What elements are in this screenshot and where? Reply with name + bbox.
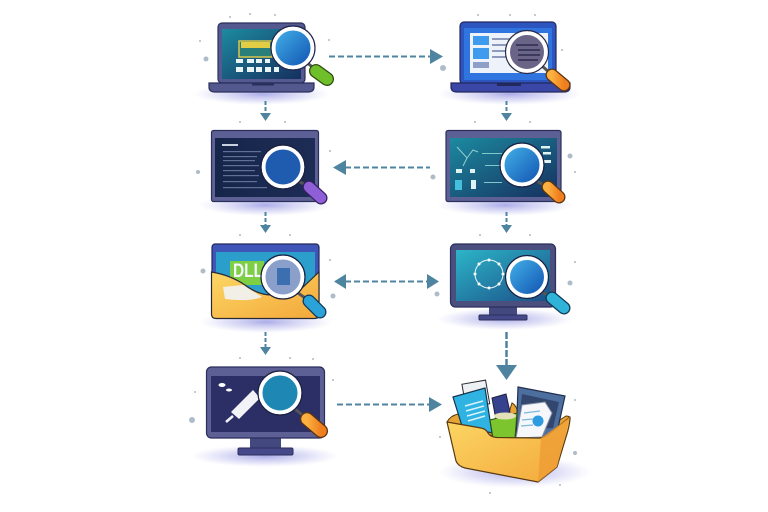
arrow: row 2 left down	[260, 212, 271, 233]
magnifier	[261, 255, 320, 312]
arrow: laptop to laptop	[329, 49, 443, 64]
label: DLL: DLL	[233, 261, 263, 282]
magnifier	[506, 30, 564, 85]
magnifier	[258, 371, 321, 431]
arrow: row 1 left down	[260, 101, 271, 121]
arrow: row 2 right down	[501, 212, 512, 233]
arrow: row 3 left down	[260, 332, 271, 355]
item 4: diagram window	[437, 130, 573, 216]
item 5: DLL folder	[200, 244, 332, 333]
magnifier	[506, 256, 564, 308]
arrow: row 2 right to left	[333, 160, 430, 175]
magnifier	[271, 26, 327, 79]
item 6: monitor with circle	[437, 244, 573, 330]
folder front	[447, 417, 570, 482]
tablet	[516, 387, 565, 440]
icon: syringe	[231, 390, 260, 419]
arrow: to folder	[496, 332, 517, 380]
item 7: monitor with syringe	[191, 367, 339, 467]
white sheet	[462, 380, 490, 408]
green book	[490, 413, 517, 438]
paper with seal	[516, 402, 552, 438]
item 8: folder with files	[439, 380, 591, 488]
arrow: row 4 to folder	[337, 397, 442, 412]
item 3: code window	[199, 130, 331, 216]
dark notebook	[492, 394, 510, 420]
item 2: laptop with document	[438, 22, 582, 105]
arrow: row 3 bidirectional	[334, 274, 439, 289]
magnifier	[261, 145, 321, 198]
decorative dots	[189, 13, 577, 494]
magnifier	[500, 143, 559, 197]
blue document	[453, 388, 492, 433]
item 1: laptop with keypad	[194, 23, 330, 105]
arrow: row 1 right down	[501, 101, 512, 121]
